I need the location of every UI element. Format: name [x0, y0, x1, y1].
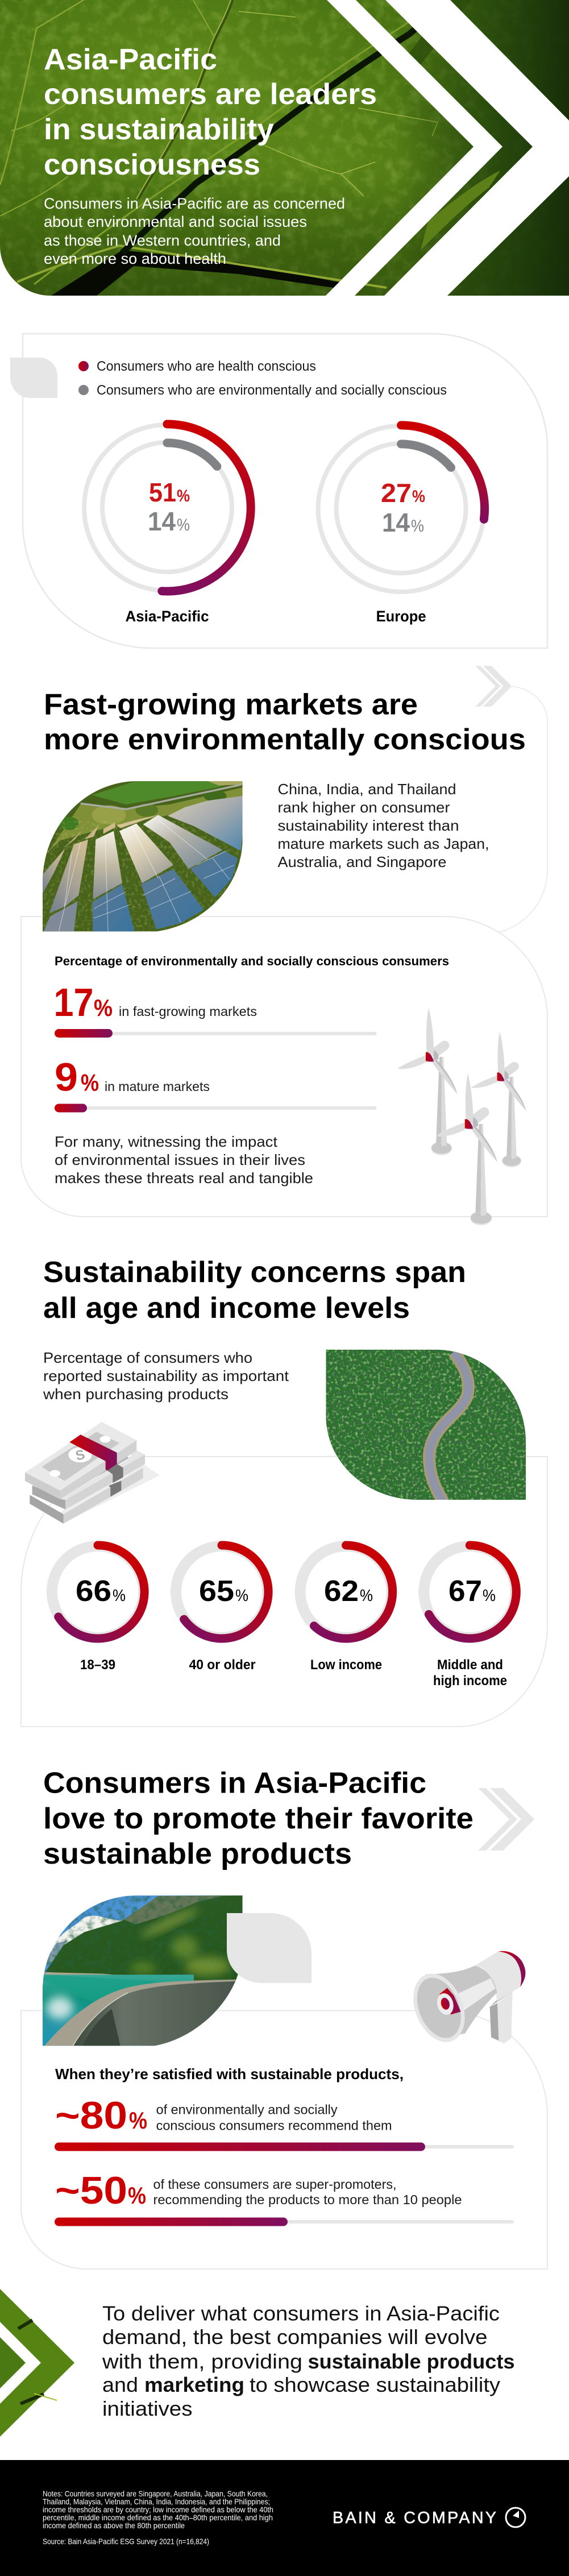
- icon: stack of money: S: [74, 1447, 86, 1464]
- icon: stack of money: [25, 1422, 160, 1524]
- footnotes and source: income defined as above the 80th percentile: [43, 2521, 185, 2530]
- donut chart: Asia-Pacific: [84, 424, 251, 625]
- bar chart: conscious consumers by market type: in mature markets: [105, 1079, 210, 1094]
- text: percentage description: when purchasing products: [43, 1386, 229, 1403]
- heading: sustainability concerns: [43, 1256, 466, 1325]
- donut chart: Asia-Pacific: 51: [149, 478, 176, 507]
- donut chart: middle and high income: high income: [433, 1673, 507, 1689]
- bar chart: recommendation rates: %: [129, 2107, 147, 2134]
- panel: age and income donuts: [21, 1457, 547, 1727]
- text: percentage description: [43, 1349, 289, 1403]
- bar chart: recommendation rates: conscious consumers recommend them: [156, 2118, 392, 2133]
- text: markets description: sustainability interest than: [277, 817, 459, 834]
- hero subtitle: as those in Western countries, and: [44, 232, 281, 249]
- footer: [0, 2460, 569, 2576]
- bar chart: conscious consumers by market type: %: [94, 994, 113, 1021]
- text: markets description: [277, 781, 489, 870]
- hero subtitle: even more so about health: [44, 250, 226, 267]
- donut chart: Asia-Pacific: Asia-Pacific: [125, 608, 209, 625]
- donut chart: low income: Low income: [310, 1657, 382, 1673]
- photo: solar panels leaf: [43, 781, 243, 931]
- bar chart: recommendation rates: of these consumers are super-promoters,: [153, 2177, 397, 2192]
- photo: dam and mountain leaf: [37, 1890, 246, 2050]
- hero title: in sustainability: [44, 113, 274, 146]
- bar chart: recommendation rates: of environmentally and socially: [156, 2102, 338, 2117]
- bar chart: conscious consumers by market type: [53, 954, 449, 1112]
- text: percentage description: reported sustainability as important: [43, 1367, 289, 1384]
- text: conclusion: To deliver what consumers in Asia-Pacific: [102, 2301, 500, 2325]
- text: percentage description: Percentage of consumers who: [43, 1349, 252, 1366]
- text: conclusion: and: [102, 2373, 138, 2396]
- bar chart: recommendation rates: recommending the products to more than 10 people: [153, 2192, 462, 2207]
- donut chart: Europe: %: [411, 517, 424, 536]
- icon: grey leaf shape: [10, 358, 57, 398]
- donut chart: Asia-Pacific: %: [177, 487, 190, 505]
- text: conclusion: initiatives: [102, 2397, 192, 2420]
- icon: megaphone: [404, 1951, 525, 2050]
- donut chart: Asia-Pacific: 14: [148, 507, 176, 536]
- heading: promote sustainable products: love to promote their favorite: [43, 1802, 474, 1835]
- section outline: fast-growing markets: [499, 686, 547, 932]
- heading: sustainability concerns: all age and income levels: [43, 1292, 410, 1325]
- hero subtitle: [44, 195, 345, 267]
- text: conclusion: demand, the best companies will evolve: [102, 2325, 488, 2349]
- heading: promote sustainable products: sustainable products: [43, 1837, 352, 1870]
- legend: Consumers who are health conscious: [97, 359, 316, 374]
- panel: percentage of conscious consumers: [21, 916, 547, 1217]
- donut chart: Europe: 27: [381, 478, 412, 508]
- donut chart: low income: %: [360, 1587, 373, 1605]
- hero title: consciousness: [44, 148, 260, 181]
- footnotes and source: Notes: Countries surveyed are Singapore, Australia, Japan, South Korea,: [43, 2489, 268, 2498]
- text: markets description: China, India, and Thailand: [277, 781, 456, 798]
- icon: green leaf chevrons: [0, 2289, 74, 2437]
- donut chart: 18-39: %: [113, 1587, 126, 1605]
- icon: section two chevrons: [475, 666, 512, 707]
- text: conclusion: [102, 2301, 515, 2420]
- hero title: consumers are leaders: [44, 78, 377, 111]
- donut chart: 40 or older: %: [235, 1587, 248, 1605]
- donut chart: Europe: 14: [382, 508, 410, 537]
- donut chart: Europe: %: [412, 487, 425, 506]
- hero subtitle: Consumers in Asia-Pacific are as concerned: [44, 195, 345, 212]
- donut chart: 40 or older: 40 or older: [189, 1657, 256, 1673]
- bar chart: conscious consumers by market type: Percentage of environmentally and socially conscious consumers: [55, 954, 449, 968]
- hero title: [44, 43, 377, 181]
- heading: promote sustainable products: Consumers in Asia-Pacific: [43, 1767, 426, 1800]
- footnotes and source: Thailand, Malaysia, Vietnam, China, India, Indonesia, and the Philippines;: [43, 2497, 270, 2506]
- heading: fast-growing markets: more environmentally conscious: [44, 723, 526, 756]
- legend: Consumers who are environmentally and socially conscious: [97, 383, 447, 398]
- footnotes and source: [43, 2489, 273, 2546]
- hero title: Asia-Pacific: [44, 43, 217, 76]
- icon: wind turbines: [397, 1008, 526, 1225]
- text: conclusion: to showcase sustainability: [250, 2373, 500, 2396]
- panel: health vs environment comparison: [10, 334, 547, 648]
- bar chart: conscious consumers by market type: 9: [55, 1055, 78, 1100]
- text: impact of environmental issues: of environmental issues in their lives: [55, 1151, 305, 1168]
- donut chart: 18-39: 66: [76, 1575, 111, 1608]
- donut chart: middle and high income: %: [483, 1587, 496, 1605]
- donut chart: 40 or older: 65: [199, 1575, 234, 1608]
- text: markets description: rank higher on consumer: [277, 799, 450, 816]
- footnotes and source: percentile, middle income defined as the 40th–80th percentile, and high: [43, 2513, 273, 2522]
- heading: fast-growing markets: [44, 688, 526, 756]
- donut chart: middle and high income: 67: [448, 1575, 482, 1608]
- donut chart: 40 or older: [176, 1545, 268, 1673]
- heading: promote sustainable products: [43, 1767, 474, 1870]
- bar chart: recommendation rates: When they’re satisfied with sustainable products,: [55, 2065, 404, 2083]
- text: impact of environmental issues: [55, 1133, 313, 1187]
- text: conclusion: with them, providing: [102, 2350, 302, 2373]
- text: markets description: Australia, and Singapore: [277, 853, 447, 870]
- donut chart: middle and high income: Middle and: [437, 1657, 503, 1673]
- heading: fast-growing markets: Fast-growing markets are: [44, 688, 418, 721]
- text: conclusion: marketing: [144, 2373, 244, 2396]
- text: impact of environmental issues: makes these threats real and tangible: [55, 1169, 313, 1187]
- footnotes and source: Source: Bain Asia-Pacific ESG Survey 2021 (n=16,824): [43, 2537, 209, 2546]
- bar chart: conscious consumers by market type: %: [81, 1069, 99, 1096]
- hero panel: leaf photo with chevrons: [0, 0, 569, 296]
- text: conclusion: sustainable products: [308, 2350, 515, 2373]
- donut chart: low income: 62: [324, 1575, 359, 1608]
- bar chart: recommendation rates: [55, 2065, 514, 2226]
- donut chart: Europe: Europe: [376, 608, 426, 625]
- bar chart: conscious consumers by market type: in fast-growing markets: [119, 1004, 257, 1019]
- icon: grey leaf shape over photo: [227, 1913, 312, 1983]
- icon: section four chevrons: [478, 1788, 534, 1851]
- donut chart: middle and high income: [424, 1545, 516, 1689]
- donut chart: 18-39: 18–39: [80, 1657, 115, 1673]
- footnotes and source: income thresholds are by country; low income defined as below the 40th: [43, 2505, 273, 2514]
- bar chart: recommendation rates: %: [128, 2182, 146, 2209]
- bar chart: recommendation rates: ~50: [55, 2169, 127, 2212]
- photo: forest road leaf: [324, 1347, 529, 1502]
- heading: sustainability concerns: Sustainability concerns span: [43, 1256, 466, 1289]
- text: impact of environmental issues: For many, witnessing the impact: [55, 1133, 278, 1150]
- donut chart: 18-39: [52, 1545, 144, 1673]
- donut chart: Europe: [318, 425, 485, 625]
- legend: [78, 359, 447, 398]
- panel: recommendation statistics: [21, 2010, 547, 2269]
- bar chart: recommendation rates: ~80: [55, 2094, 127, 2137]
- logo: Bain and Company: BAIN & COMPANY: [333, 2509, 496, 2527]
- text: markets description: mature markets such as Japan,: [277, 835, 489, 852]
- bar chart: conscious consumers by market type: 17: [53, 980, 93, 1024]
- hero subtitle: about environmental and social issues: [44, 213, 307, 230]
- donut chart: Asia-Pacific: %: [177, 516, 190, 534]
- donut chart: low income: [300, 1545, 393, 1673]
